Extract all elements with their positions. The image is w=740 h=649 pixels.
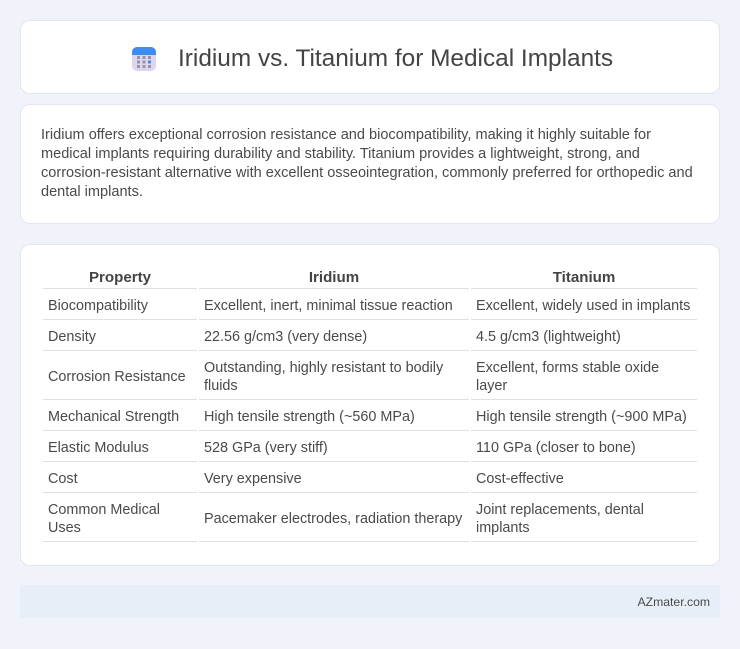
- row: Corrosion Resistance: fluids: [204, 378, 238, 394]
- row: Mechanical Strength: [48, 409, 687, 425]
- row: Corrosion Resistance: Corrosion Resistance: [48, 369, 186, 385]
- row: Elastic Modulus: Elastic Modulus: [48, 440, 149, 456]
- row: Corrosion Resistance: [48, 360, 659, 394]
- row: Biocompatibility: [48, 298, 690, 314]
- table header: [89, 269, 615, 286]
- row: Cost: Very expensive: [204, 471, 302, 487]
- text block: summary: Iridium offers exceptional corrosion resistance and biocompatibility, making it highly suitable for: [41, 127, 651, 143]
- row: Density: Density: [48, 329, 96, 345]
- row: Corrosion Resistance: Excellent, forms stable oxide: [476, 360, 659, 376]
- row: Common Medical Uses: Pacemaker electrodes, radiation therapy: [204, 511, 462, 527]
- row: Common Medical Uses: [48, 502, 644, 536]
- table header: Property: [89, 269, 151, 286]
- panel: comparison table: [20, 244, 720, 566]
- row: Corrosion Resistance: Outstanding, highly resistant to bodily: [204, 360, 443, 376]
- row: Cost: [48, 471, 564, 487]
- footer credit: AZmater.com: [638, 595, 710, 609]
- row: Biocompatibility: Excellent, inert, minimal tissue reaction: [204, 298, 453, 314]
- row: Common Medical Uses: Uses: [48, 520, 81, 536]
- row: Elastic Modulus: 528 GPa (very stiff): [204, 440, 328, 456]
- row: Cost: Cost: [48, 471, 78, 487]
- icon: calendar: [132, 47, 156, 71]
- row: Density: [48, 329, 621, 345]
- text block: summary: dental implants.: [41, 184, 143, 200]
- row: Density: 4.5 g/cm3 (lightweight): [476, 329, 621, 345]
- row: Density: 22.56 g/cm3 (very dense): [204, 329, 367, 345]
- row: Biocompatibility: Biocompatibility: [48, 298, 148, 314]
- row: Mechanical Strength: Mechanical Strength: [48, 409, 179, 425]
- row: Cost: Cost-effective: [476, 471, 564, 487]
- row: Corrosion Resistance: layer: [476, 378, 507, 394]
- row: Common Medical Uses: implants: [476, 520, 530, 536]
- text block: summary: medical implants requiring durability and stability. Titanium provides a lightweight, strong, and: [41, 146, 640, 162]
- footer bar: [20, 585, 720, 618]
- panel: title card: [20, 20, 720, 94]
- row: Mechanical Strength: High tensile strength (~900 MPa): [476, 409, 687, 425]
- row: Elastic Modulus: [48, 440, 636, 456]
- title: Iridium vs. Titanium for Medical Implants: [178, 45, 613, 72]
- text block: summary: [41, 127, 693, 200]
- row: Biocompatibility: Excellent, widely used in implants: [476, 298, 690, 314]
- text block: summary: corrosion-resistant alternative with excellent osseointegration, commonly preferred for orthopedic and: [41, 165, 693, 181]
- row: Common Medical Uses: Joint replacements, dental: [476, 502, 644, 518]
- table header: Titanium: [553, 269, 615, 286]
- row: Elastic Modulus: 110 GPa (closer to bone): [476, 440, 636, 456]
- table header: Iridium: [309, 269, 359, 286]
- panel: summary: [20, 104, 720, 224]
- row: Mechanical Strength: High tensile strength (~560 MPa): [204, 409, 415, 425]
- row: Common Medical Uses: Common Medical: [48, 502, 160, 518]
